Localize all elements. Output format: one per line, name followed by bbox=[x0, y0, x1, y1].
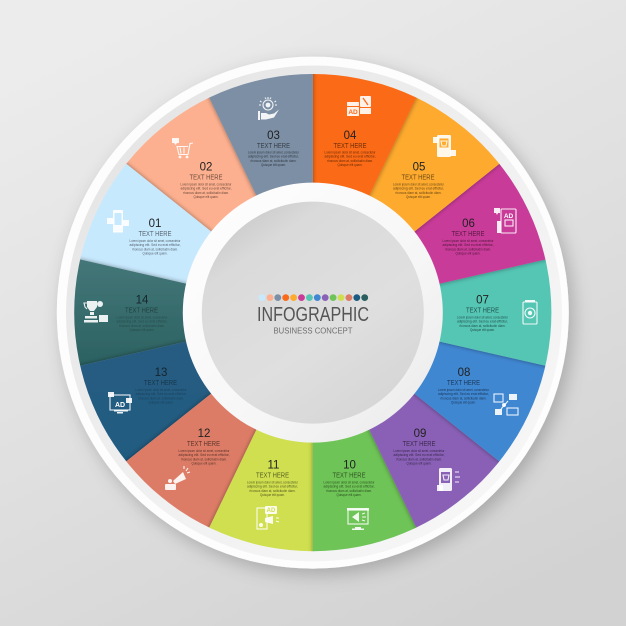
segment 07 wedge bbox=[439, 258, 552, 368]
text block 12: TEXT HERE bbox=[187, 439, 220, 448]
segment 05 wedge bbox=[369, 97, 501, 234]
text block 07: Lorem ipsum dolor sit amet, consectetur bbox=[457, 316, 509, 320]
text block 07 bbox=[457, 294, 509, 332]
icon: 10 monitor with megaphone bbox=[347, 508, 369, 530]
text block 03: adipiscing elit. Sed eu erat efficitur, bbox=[248, 155, 299, 159]
text block 11: Quisque elit quam. bbox=[260, 493, 285, 497]
text block 11: TEXT HERE bbox=[256, 470, 289, 480]
text block 14: adipiscing elit. Sed eu erat efficitur, bbox=[116, 320, 168, 324]
segment 09 wedge bbox=[367, 394, 500, 528]
text block 01: 01 bbox=[149, 218, 161, 230]
icon: 02 shopping cart bbox=[172, 138, 193, 158]
text block 09: Lorem ipsum dolor sit amet, consectetur bbox=[394, 449, 445, 453]
text block 02: TEXT HERE bbox=[190, 172, 222, 182]
text block 05: adipiscing elit. Sed eu erat efficitur, bbox=[393, 187, 444, 191]
text block 05: Quisque elit quam. bbox=[406, 195, 431, 199]
icon: 06 AD tablet: AD bbox=[504, 213, 513, 220]
segment 03 wedge bbox=[206, 74, 316, 196]
icon: 04 AD boards: AD bbox=[348, 109, 358, 116]
text block 06: adipiscing elit. Sed eu erat efficitur, bbox=[442, 243, 494, 247]
centre disk bbox=[202, 202, 424, 424]
text block 13: Lorem ipsum dolor sit amet, consectetur bbox=[136, 388, 187, 392]
text block 03: Quisque elit quam. bbox=[261, 163, 286, 167]
text block 13: adipiscing elit. Sed eu erat efficitur, bbox=[136, 392, 187, 396]
colour dots row bbox=[259, 294, 368, 301]
text block 06: Lorem ipsum dolor sit amet, consectetur bbox=[442, 239, 494, 243]
segment 04 wedge bbox=[312, 74, 419, 196]
text block 14: rhoncus diam at, sollicitudin diam. bbox=[119, 324, 165, 328]
text block 07: Quisque elit quam. bbox=[470, 328, 495, 332]
text block 11 bbox=[247, 460, 299, 497]
text block 14: Quisque elit quam. bbox=[130, 328, 155, 332]
text block 10 bbox=[324, 460, 375, 497]
text block 06: Quisque elit quam. bbox=[456, 252, 481, 256]
text block 01: Quisque elit quam. bbox=[142, 252, 168, 256]
icon: 07 badge card bbox=[523, 300, 537, 324]
text block 03: 03 bbox=[267, 130, 280, 142]
text block 13: rhoncus diam at, sollicitudin diam. bbox=[138, 396, 184, 400]
text block 04 bbox=[324, 130, 376, 167]
text block 01: TEXT HERE bbox=[138, 229, 172, 238]
icon: 08 connected AD blocks bbox=[494, 394, 518, 415]
text block 14: TEXT HERE bbox=[125, 306, 158, 314]
icon: 01 phone with chat bubbles bbox=[107, 210, 129, 232]
inner white ring bbox=[183, 183, 443, 443]
text block 08: Lorem ipsum dolor sit amet, consectetur bbox=[438, 388, 490, 392]
text block 08: rhoncus diam at, sollicitudin diam. bbox=[440, 396, 487, 400]
icon: 12 megaphone and person bbox=[165, 466, 190, 490]
segment 10 wedge bbox=[310, 430, 417, 552]
icon: 14 trophy and gifts bbox=[84, 301, 108, 322]
wheel segments bbox=[74, 74, 552, 552]
text block 07: rhoncus diam at, sollicitudin diam. bbox=[460, 324, 506, 328]
text block 14: 14 bbox=[136, 294, 149, 306]
text block 03: TEXT HERE bbox=[257, 141, 290, 150]
text block 01: Lorem ipsum dolor sit amet, consectetur bbox=[130, 239, 181, 243]
segment 06 wedge bbox=[414, 163, 546, 286]
text block 13 bbox=[136, 367, 187, 405]
text block 13: TEXT HERE bbox=[144, 378, 177, 387]
text block 03 bbox=[248, 130, 300, 167]
segment 12 wedge bbox=[125, 392, 256, 528]
text block 09: adipiscing elit. Sed eu erat efficitur, bbox=[394, 453, 445, 457]
text block 13: 13 bbox=[155, 367, 167, 379]
text block 14 bbox=[116, 294, 168, 332]
text block 10: Quisque elit quam. bbox=[336, 493, 362, 497]
text block 03: rhoncus diam at, sollicitudin diam. bbox=[250, 159, 297, 163]
text block 08: TEXT HERE bbox=[447, 378, 480, 387]
icon: 09 phone with cart bbox=[437, 468, 460, 491]
text block 04: Quisque elit quam. bbox=[338, 163, 363, 167]
text block 13: Quisque elit quam. bbox=[148, 401, 174, 405]
segment 11 wedge bbox=[206, 428, 314, 552]
text block 10: rhoncus diam at, sollicitudin diam. bbox=[326, 489, 372, 493]
text block 06 bbox=[442, 218, 494, 256]
icon: 03 hand holding badge bbox=[258, 97, 279, 120]
text block 08: adipiscing elit. Sed eu erat efficitur, bbox=[438, 392, 489, 396]
icon: 13 AD monitor bbox=[108, 392, 132, 414]
icon: 04 AD boards bbox=[347, 96, 371, 116]
text block 12: Lorem ipsum dolor sit amet, consectetur bbox=[178, 449, 230, 453]
segment 01 wedge bbox=[80, 162, 213, 284]
text block 06: TEXT HERE bbox=[452, 229, 484, 238]
text block 05: Lorem ipsum dolor sit amet, consectetur bbox=[393, 182, 445, 186]
text block 09: 09 bbox=[414, 428, 426, 440]
text block 09 bbox=[394, 428, 445, 466]
text block 05: 05 bbox=[413, 162, 425, 174]
text block 01 bbox=[130, 218, 181, 256]
text block 02: Lorem ipsum dolor sit amet, consectetur bbox=[180, 182, 232, 186]
text block 04: adipiscing elit. Sed eu erat efficitur, bbox=[324, 155, 376, 159]
icon: 05 mobile shop bbox=[433, 135, 456, 157]
text block 05: TEXT HERE bbox=[402, 172, 434, 182]
text block 09: rhoncus diam at, sollicitudin diam. bbox=[396, 457, 442, 461]
text block 10: Lorem ipsum dolor sit amet, consectetur bbox=[324, 480, 375, 484]
text block 01: rhoncus diam at, sollicitudin diam. bbox=[132, 247, 178, 251]
text block 05: rhoncus diam at, sollicitudin diam. bbox=[396, 191, 442, 195]
text block 08: Quisque elit quam. bbox=[451, 401, 476, 405]
text block 02 bbox=[180, 162, 232, 199]
text block 09: Quisque elit quam. bbox=[406, 462, 432, 466]
text block 02: 02 bbox=[200, 162, 212, 174]
text block 08: 08 bbox=[458, 367, 470, 379]
subtitle: BUSINESS CONCEPT bbox=[274, 326, 353, 336]
text block 07: adipiscing elit. Sed eu erat efficitur, bbox=[457, 320, 508, 324]
text block 12: Quisque elit quam. bbox=[192, 462, 217, 466]
text block 04: 04 bbox=[344, 130, 357, 142]
text block 14: Lorem ipsum dolor sit amet, consectetur bbox=[116, 316, 168, 320]
text block 01: adipiscing elit. Sed eu erat efficitur, bbox=[130, 243, 181, 247]
text block 04: TEXT HERE bbox=[334, 141, 366, 150]
text block 10: TEXT HERE bbox=[332, 470, 366, 480]
text block 10: adipiscing elit. Sed eu erat efficitur, bbox=[324, 485, 375, 489]
segment 13 wedge bbox=[80, 340, 211, 462]
text block 11: adipiscing elit. Sed eu erat efficitur, bbox=[247, 485, 298, 489]
text block 02: rhoncus diam at, sollicitudin diam. bbox=[183, 191, 229, 195]
text block 06: 06 bbox=[462, 218, 475, 230]
icon: 11 AD phone with speaker bbox=[257, 506, 279, 529]
text block 12: 12 bbox=[198, 428, 210, 440]
icon: 06 AD tablet bbox=[494, 208, 516, 233]
text block 07: TEXT HERE bbox=[466, 306, 499, 314]
text block 06: rhoncus diam at, sollicitudin diam. bbox=[445, 247, 491, 251]
text block 02: Quisque elit quam. bbox=[194, 195, 219, 199]
text block 08 bbox=[438, 367, 490, 405]
icon: 13 AD monitor: AD bbox=[115, 402, 125, 409]
text block 07: 07 bbox=[476, 294, 489, 306]
text block 11: 11 bbox=[268, 460, 279, 472]
text block 04: rhoncus diam at, sollicitudin diam. bbox=[327, 159, 373, 163]
text block 11: Lorem ipsum dolor sit amet, consectetur bbox=[247, 480, 299, 484]
text block 04: Lorem ipsum dolor sit amet, consectetur bbox=[324, 150, 376, 154]
text block 09: TEXT HERE bbox=[402, 439, 436, 448]
text block 12: adipiscing elit. Sed eu erat efficitur, bbox=[178, 453, 230, 457]
icon: 11 AD phone with speaker: AD bbox=[267, 508, 276, 514]
outer white ring bbox=[57, 57, 569, 569]
text block 03: Lorem ipsum dolor sit amet, consectetur bbox=[248, 150, 300, 154]
text block 12 bbox=[178, 428, 230, 466]
text block 12: rhoncus diam at, sollicitudin diam. bbox=[181, 457, 227, 461]
title: INFOGRAPHIC bbox=[257, 304, 369, 326]
text block 02: adipiscing elit. Sed eu erat efficitur, bbox=[180, 187, 232, 191]
text block 11: rhoncus diam at, sollicitudin diam. bbox=[250, 489, 296, 493]
text block 05 bbox=[393, 162, 445, 199]
segment 08 wedge bbox=[413, 342, 546, 464]
text block 10: 10 bbox=[343, 460, 356, 472]
segment 14 wedge bbox=[74, 256, 186, 366]
segment 02 wedge bbox=[126, 98, 256, 232]
